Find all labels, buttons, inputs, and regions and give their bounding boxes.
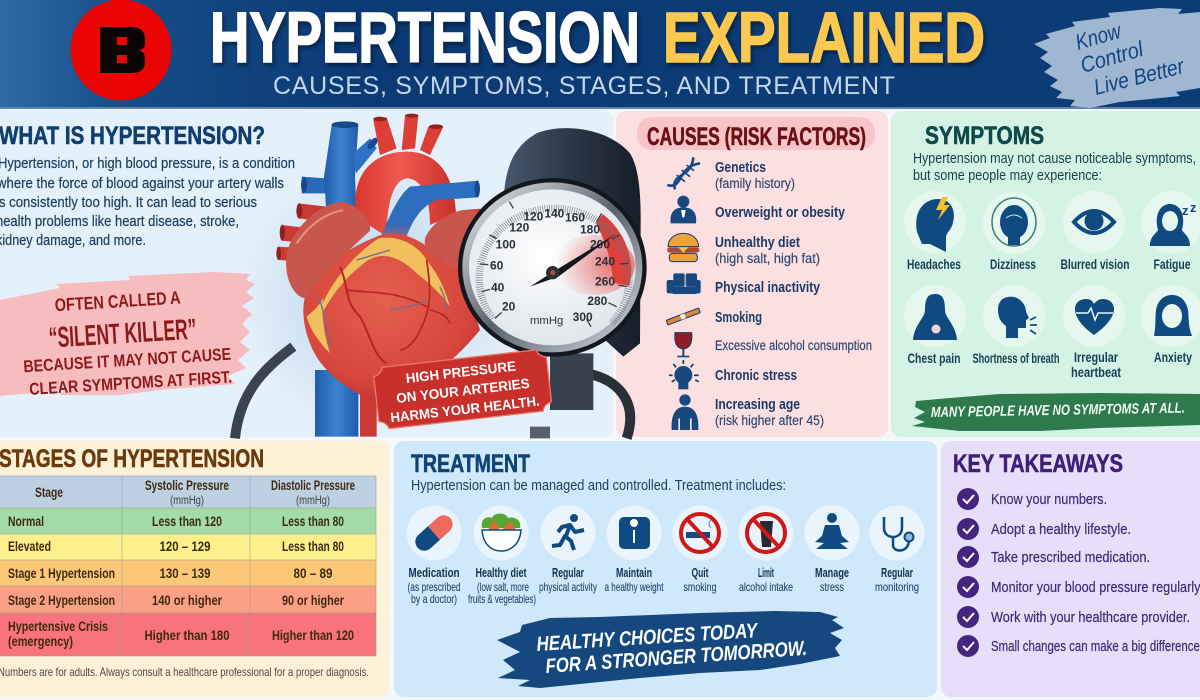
icon: pressure gauge: 300	[573, 310, 593, 324]
icon: pressure gauge: mmHg	[530, 315, 563, 327]
panel: symptoms	[891, 111, 1200, 437]
treatment: medication: (as prescribed	[408, 580, 460, 594]
treatment: healthy weight: a healthy weight	[604, 580, 664, 594]
silent killer callout: BECAUSE IT MAY NOT CAUSE	[23, 345, 232, 376]
treatment: physical activity: Regular	[552, 565, 584, 580]
banner: healthy choices: HEALTHY CHOICES TODAY	[536, 619, 760, 656]
cause list: (high salt, high fat)	[715, 251, 820, 266]
definition text: kidney damage, and more.	[0, 232, 146, 249]
heading: KEY TAKEAWAYS	[953, 450, 1123, 478]
panel: treatment	[394, 441, 937, 697]
cause list: Smoking	[715, 310, 762, 326]
symptom: irregular heartbeat: heartbeat	[1071, 365, 1121, 380]
banner: no symptoms	[912, 393, 1200, 431]
symptom: dizziness: Dizziness	[990, 257, 1036, 272]
icon: pressure gauge: 20	[502, 300, 516, 314]
treatment: manage stress: Manage	[815, 565, 849, 580]
treatment: manage stress: stress	[820, 580, 844, 594]
stages table: Higher than 120	[272, 628, 354, 643]
treatment: regular monitoring: monitoring	[875, 580, 919, 594]
treatment: limit alcohol	[738, 506, 794, 594]
symptom: chest pain: Chest pain	[908, 351, 960, 366]
treatment: medication: Medication	[408, 565, 460, 580]
heading: TREATMENT	[411, 450, 530, 478]
banner: healthy choices: FOR A STRONGER TOMORROW.	[545, 637, 808, 678]
icon: couch	[667, 273, 701, 294]
cause list: Chronic stress	[715, 368, 797, 384]
icon: pressure gauge: 120	[509, 221, 530, 235]
definition text: Hypertension, or high blood pressure, is a condition	[0, 155, 295, 172]
definition text: health problems like heart disease, stroke,	[0, 213, 239, 230]
icon: burger	[667, 233, 699, 262]
icon: wine glass	[675, 333, 692, 357]
stages table: 80 – 89	[294, 566, 332, 581]
treatment: limit alcohol: alcohol intake	[739, 580, 793, 594]
icon: dna	[667, 157, 700, 189]
stages table: 140 or higher	[152, 593, 223, 608]
heading: SYMPTOMS	[925, 122, 1044, 150]
treatment: physical activity	[539, 506, 597, 594]
symptom: headaches: Headaches	[907, 257, 961, 272]
symptom: blurred vision: Blurred vision	[1060, 257, 1130, 272]
cause list: Overweight or obesity	[715, 205, 845, 221]
callout: high pressure sign	[373, 349, 552, 430]
icon: pressure gauge: 160	[565, 211, 585, 225]
treatment: quit smoking	[672, 506, 728, 594]
silent killer callout: “SILENT KILLER”	[48, 314, 197, 355]
symptom: irregular heartbeat	[1063, 285, 1125, 380]
definition text: is consistently too high. It can lead to serious	[0, 194, 257, 211]
symptom: dizziness	[983, 192, 1045, 272]
icon: pressure gauge: 180	[580, 223, 600, 237]
stages table: Stage 1 Hypertension	[8, 566, 115, 581]
treatment: healthy diet: Healthy diet	[476, 565, 527, 580]
icon: pressure gauge: 40	[491, 281, 505, 295]
treatment: medication: by a doctor)	[411, 592, 457, 606]
symptom: blurred vision	[1060, 191, 1130, 272]
stages table: Less than 120	[152, 514, 222, 529]
takeaway 5	[957, 606, 1190, 628]
symptom: shortness of breath	[972, 285, 1060, 366]
treatment: healthy weight	[604, 506, 664, 594]
icon: older person	[672, 394, 698, 430]
stages table: Higher than 180	[144, 628, 230, 643]
treatment: medication	[406, 506, 462, 606]
table footnote: Numbers are for adults. Always consult a healthcare professional for a proper diagnosis.	[0, 665, 369, 679]
symptom: shortness of breath: Shortness of breath	[972, 351, 1060, 366]
symptom: fatigue: z	[1190, 200, 1197, 215]
treatment: healthy diet	[468, 506, 536, 606]
takeaway 3: Take prescribed medication.	[991, 549, 1150, 566]
illustration: heart and gauge	[235, 114, 647, 438]
title: HYPERTENSION	[210, 0, 640, 78]
cause list: (risk higher after 45)	[715, 413, 824, 428]
brush tagline: Control	[1077, 36, 1147, 78]
definition text	[0, 155, 295, 249]
takeaway 2: Adopt a healthy lifestyle.	[991, 521, 1131, 538]
stages table: Less than 80	[282, 539, 344, 554]
treatment: quit smoking: smoking	[684, 580, 716, 594]
takeaway 6	[957, 635, 1200, 657]
stages table: (emergency)	[8, 634, 73, 649]
title: EXPLAINED	[663, 0, 985, 78]
takeaway 2	[957, 518, 1131, 540]
intro text: but some people may experience:	[913, 167, 1102, 184]
symptom: anxiety	[1141, 285, 1200, 365]
icon: pressure gauge: 240	[595, 255, 615, 269]
brush tagline	[1034, 8, 1200, 108]
takeaway 1: Know your numbers.	[991, 491, 1107, 508]
subtitle: CAUSES, SYMPTOMS, STAGES, AND TREATMENT	[273, 72, 895, 100]
symptom: headaches	[904, 191, 966, 272]
symptom: chest pain	[904, 285, 966, 366]
callout: high pressure sign: HARMS YOUR HEALTH.	[390, 393, 540, 425]
callout: high pressure sign: ON YOUR ARTERIES	[396, 376, 530, 406]
stages table: Less than 80	[282, 514, 344, 529]
stages table: Normal	[8, 514, 44, 529]
takeaway 1	[957, 488, 1107, 510]
symptom: fatigue	[1141, 191, 1200, 272]
callout: high pressure sign: HIGH PRESSURE	[405, 359, 517, 386]
icon: pressure gauge: 260	[595, 275, 615, 289]
treatment: healthy weight: Maintain	[616, 565, 652, 580]
panel: what is hypertension	[0, 110, 613, 437]
banner: healthy choices	[497, 611, 844, 688]
treatment: healthy diet: fruits & vegetables)	[468, 592, 536, 606]
stages table	[0, 476, 376, 656]
icon: pressure gauge: 120	[523, 209, 544, 223]
stages table: Diastolic Pressure	[271, 478, 355, 493]
header banner	[0, 0, 1200, 109]
heading: STAGES OF HYPERTENSION	[0, 445, 264, 473]
brush tagline: Know	[1072, 18, 1125, 55]
treatment: regular monitoring: Regular	[881, 565, 913, 580]
icon: cuff	[503, 128, 641, 357]
intro text: Hypertension can be managed and controlled. Treatment includes:	[411, 477, 786, 494]
logo: red circle B	[70, 0, 172, 100]
heading: WHAT IS HYPERTENSION?	[0, 122, 265, 150]
icon: pressure gauge: 140	[544, 206, 565, 220]
definition text: where the force of blood against your artery walls	[0, 175, 284, 192]
cause list: Unhealthy diet	[715, 235, 800, 251]
treatment: physical activity: physical activity	[539, 580, 597, 594]
heading pill: CAUSES (RISK FACTORS)	[647, 123, 866, 151]
icon: tube right	[587, 373, 630, 438]
stages table: Stage 2 Hypertension	[8, 593, 115, 608]
cause list: Genetics	[715, 160, 766, 176]
icon: tube left	[235, 347, 293, 438]
icon: overweight person	[670, 196, 696, 223]
icon: heart	[276, 114, 487, 437]
takeaway 4	[957, 576, 1200, 598]
icon: pressure gauge	[458, 178, 647, 357]
stages table: 130 – 139	[160, 566, 210, 581]
treatment: healthy diet: (low salt, more	[477, 580, 529, 594]
panel: stages	[0, 441, 390, 697]
cause list: Physical inactivity	[715, 280, 820, 296]
icon: pressure gauge: 200	[590, 237, 610, 251]
icon: stress head	[669, 360, 699, 389]
silent killer callout: OFTEN CALLED A	[54, 288, 181, 315]
stages table: Stage	[35, 485, 63, 500]
icon: cigarette	[666, 308, 700, 325]
silent killer callout	[0, 272, 255, 399]
cause list: (family history)	[715, 176, 795, 191]
treatment: quit smoking: Quit	[692, 565, 709, 580]
symptom: irregular heartbeat: Irregular	[1074, 350, 1119, 365]
stages table: (mmHg)	[170, 493, 204, 507]
cause list: Increasing age	[715, 397, 800, 413]
stages table: 120 – 129	[160, 539, 210, 554]
stages table: Systolic Pressure	[145, 478, 229, 493]
icon: pressure gauge: 60	[490, 258, 504, 272]
symptom: fatigue: z	[1182, 203, 1189, 218]
stages table: Hypertensive Crisis	[8, 619, 108, 634]
stages table: 90 or higher	[282, 593, 345, 608]
treatment: regular monitoring	[870, 506, 924, 594]
icon: pressure gauge: 100	[496, 237, 516, 251]
treatment: limit alcohol: Limit	[758, 565, 774, 580]
panel: causes	[616, 111, 888, 437]
cause icons	[666, 157, 701, 430]
panel: key takeaways	[941, 441, 1200, 697]
cause list: Excessive alcohol consumption	[715, 338, 872, 353]
treatment: manage stress	[804, 506, 860, 594]
stages table: (mmHg)	[296, 493, 330, 507]
takeaway 3	[957, 546, 1150, 568]
stages table: Elevated	[8, 539, 51, 554]
silent killer callout: CLEAR SYMPTOMS AT FIRST.	[29, 368, 233, 399]
cause list	[715, 160, 872, 428]
heading pill	[637, 117, 875, 151]
intro text	[913, 150, 1196, 184]
icon: pressure gauge: 280	[587, 294, 608, 308]
brush tagline: Live Better	[1091, 53, 1188, 100]
